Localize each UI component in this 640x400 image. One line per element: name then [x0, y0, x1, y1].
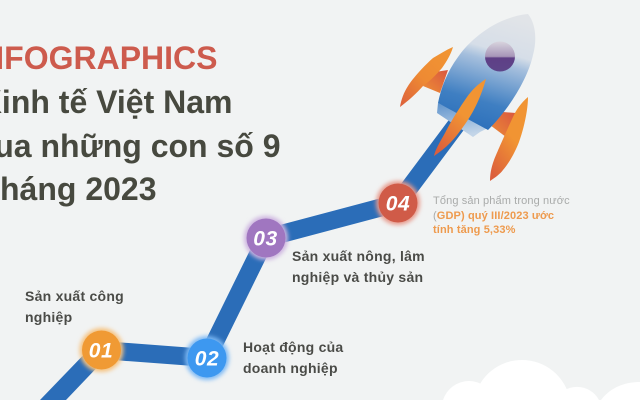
label 02: Hoạt động của	[243, 339, 343, 355]
step 03	[244, 216, 288, 260]
step 01	[80, 328, 124, 372]
label 01: nghiệp	[25, 309, 72, 325]
step 04	[376, 181, 420, 225]
label 04: GDP note: Tổng sản phẩm trong nước	[433, 195, 570, 207]
right fin	[490, 97, 528, 181]
window	[485, 42, 515, 72]
step 02	[185, 336, 229, 380]
body	[438, 14, 535, 130]
step 04: 04	[386, 192, 410, 216]
label 02: doanh nghiệp	[243, 360, 338, 376]
growth path line	[40, 112, 466, 400]
label 03: nghiệp và thủy sản	[292, 269, 423, 285]
step 03: 03	[253, 228, 278, 250]
left fin	[400, 47, 453, 107]
step 02: 02	[195, 348, 219, 370]
rocket	[400, 14, 535, 181]
step 01: 01	[89, 340, 113, 362]
label 01: Sản xuất công	[25, 288, 124, 304]
label 04: GDP note: (	[433, 210, 437, 222]
title	[0, 40, 280, 207]
collar	[437, 103, 488, 137]
center fin	[434, 79, 486, 156]
label 03: Sản xuất nông, lâm	[292, 248, 425, 264]
clouds	[443, 360, 640, 400]
label 04: GDP note: tính tăng 5,33%	[433, 224, 516, 236]
label 04: GDP note: GDP) quý III/2023 ước	[437, 210, 554, 222]
